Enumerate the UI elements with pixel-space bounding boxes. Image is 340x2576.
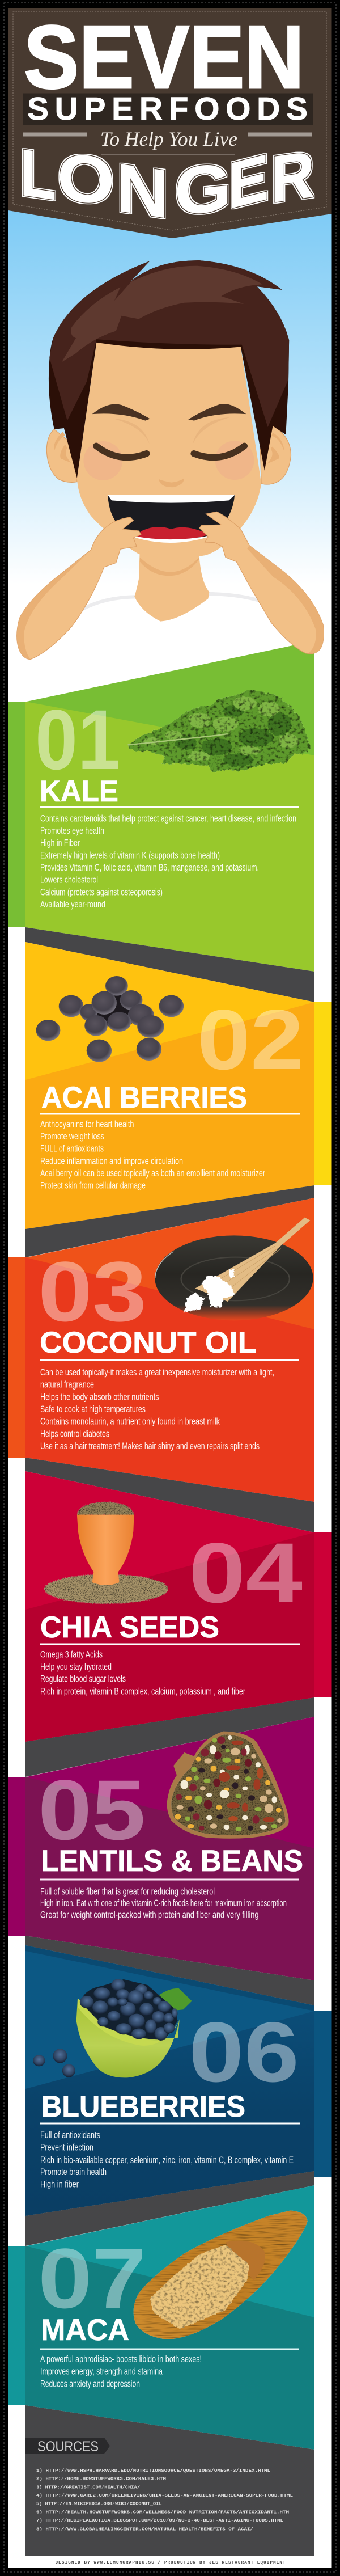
panel: kale background — [8, 641, 314, 1002]
shirt collar — [82, 594, 258, 610]
illustration: man eating — [17, 260, 324, 660]
left arm and hand — [17, 517, 141, 660]
title bar: superfoods: SUPERFOODS — [27, 91, 308, 127]
subtitle: to help you live — [23, 128, 312, 154]
panel: coconut oil background — [8, 1198, 314, 1532]
nose — [159, 478, 184, 487]
facts: acai berries: Acai berry oil can be used topically as both an emollient and moisturizer — [40, 1168, 265, 1179]
number 01: 01 — [35, 692, 120, 787]
footer credit: DESIGNED BY WWW.LEMONGRAPHIC.SG / PRODUCTION BY JES RESTAURANT EQUIPMENT — [56, 2561, 286, 2565]
facts: blueberries — [40, 2130, 294, 2190]
header banner — [8, 7, 332, 238]
facts: chia seeds: Help you stay hydrated — [40, 1661, 112, 1672]
image: heart bowl of beans — [167, 1732, 289, 1839]
image: chia seeds in orange cup — [44, 1502, 168, 1604]
facts: lentils and beans: Full of soluble fiber that is great for reducing cholesterol — [40, 1886, 215, 1897]
facts: chia seeds: Omega 3 fatty Acids — [40, 1649, 103, 1659]
facts: acai berries: Anthocyanins for heart health — [40, 1118, 134, 1129]
image: frying pan with coconut oil — [155, 1218, 313, 1320]
panel: lentils background — [8, 1717, 314, 2005]
panel: sources — [26, 2405, 314, 2556]
source links: 7) HTTP://RECIPEAEXOTICA.BLOGSPOT.COM/2010/09/NO-3-40-BEST-ANTI-AGING-FOODS.HTML — [36, 2519, 283, 2523]
number 05: 05 — [38, 1762, 146, 1857]
facts: coconut oil: Contains monolaurin, a nutrient only found in breast milk — [40, 1416, 220, 1427]
number 03: 03 — [38, 1244, 147, 1339]
title: longer: O — [57, 140, 114, 218]
neck — [134, 548, 209, 622]
facts: maca — [40, 2354, 202, 2389]
panel: acai background — [26, 942, 332, 1257]
heading: maca: MACA — [41, 2313, 129, 2347]
section 06: blueberries — [26, 1945, 332, 2246]
eyebrows — [92, 404, 246, 421]
section 03: coconut oil — [8, 1198, 314, 1532]
panel: blueberries background — [26, 1945, 332, 2246]
facts: acai berries: FULL of antioxidants — [40, 1143, 104, 1154]
heading: kale: KALE — [40, 775, 118, 808]
facts: coconut oil: Helps the body absorb other nutrients — [40, 1391, 159, 1402]
facts: kale: Extremely high levels of vitamin K (supports bone health) — [40, 850, 220, 860]
section 05: lentils and beans — [8, 1717, 314, 2005]
facts: blueberries: Promote brain health — [40, 2167, 107, 2177]
number 06: 06 — [189, 2004, 299, 2100]
title: longer: G — [175, 150, 231, 230]
facts: kale: Provides Vitamin C, folic acid, vitamin B6, manganese, and potassium. — [40, 862, 259, 873]
section 01: kale — [35, 690, 310, 910]
facts: coconut oil: Use it as a hair treatment! Makes hair shiny and even repairs split ends — [40, 1441, 260, 1451]
source links: 4) HTTP://WWW.CARE2.COM/GREENLIVING/CHIA-SEEDS-AN-ANCIENT-AMERICAN-SUPER-FOOD.HTML — [36, 2494, 293, 2498]
mouth — [108, 495, 235, 542]
source links: 2) HTTP://HOME.HOWSTUFFWORKS.COM/KALE3.HTM — [36, 2477, 166, 2481]
facts: blueberries: Full of antioxidants — [40, 2130, 100, 2140]
hair — [49, 260, 289, 478]
heading: lentils and beans: LENTILS & BEANS — [41, 1844, 303, 1878]
face — [77, 343, 261, 558]
source links: 3) HTTP://GREATIST.COM/HEALTH/CHIA/ — [36, 2486, 140, 2490]
source links: 5) HTTP://EN.WIKIPEDIA.ORG/WIKI/COCONUT_OIL — [36, 2502, 162, 2506]
section 07: maca — [8, 2185, 314, 2450]
heading: blueberries: BLUEBERRIES — [41, 2090, 245, 2123]
facts: chia seeds: Regulate blood sugar levels — [40, 1674, 126, 1684]
facts: kale: Promotes eye health — [40, 825, 104, 836]
facts: coconut oil: Helps control diabetes — [40, 1428, 109, 1439]
title: longer: E — [228, 140, 269, 222]
facts: chia seeds: Rich in protein, vitamin B complex, calcium, potassium , and fiber — [40, 1686, 245, 1696]
title: longer: R — [271, 137, 314, 217]
facts: coconut oil: natural fragrance — [40, 1379, 94, 1390]
image: wooden spoon of maca powder — [134, 2210, 308, 2339]
facts: acai berries — [40, 1118, 265, 1191]
facts: chia seeds — [40, 1649, 245, 1696]
facts: acai berries: Protect skin from cellular damage — [40, 1180, 146, 1191]
facts: lentils and beans: Great for weight control-packed with protein and fiber and very filling — [40, 1910, 258, 1920]
berries — [33, 1979, 178, 2077]
facts: kale: Lowers cholesterol — [40, 875, 98, 885]
facts: kale: Calcium (protects against osteoporosis) — [40, 886, 163, 897]
sources tag: SOURCES — [37, 2439, 99, 2455]
bowl — [76, 1998, 180, 2077]
facts: blueberries: High in fiber — [40, 2179, 79, 2190]
facts: maca: A powerful aphrodisiac- boosts libido in both sexes! — [40, 2354, 202, 2364]
section 04: chia seeds — [26, 1471, 332, 1777]
ears — [46, 426, 291, 484]
ear shading — [54, 432, 284, 464]
facts: lentils and beans — [40, 1886, 287, 1920]
facts: kale: High in Fiber — [40, 838, 80, 848]
right arm and hand — [199, 512, 324, 654]
facts: maca: Reduces anxiety and depression — [40, 2378, 140, 2389]
sky background — [8, 204, 332, 584]
heading: acai berries: ACAI BERRIES — [41, 1081, 247, 1114]
leaf — [159, 1988, 192, 2011]
number 02: 02 — [197, 992, 304, 1087]
title: longer: L — [20, 135, 56, 214]
facts: coconut oil — [40, 1367, 274, 1451]
section 02: acai berries — [26, 942, 332, 1257]
facts: coconut oil: Safe to cook at high temperatures — [40, 1404, 146, 1414]
facts: maca: Improves energy, strength and stamina — [40, 2366, 163, 2377]
panel: chia background — [26, 1471, 332, 1777]
coconut oil lumps — [184, 1269, 235, 1312]
title: seven: SEVEN — [24, 7, 304, 107]
image: acai berries — [36, 976, 184, 1062]
image: bowl of blueberries — [33, 1979, 192, 2077]
source links: 8) HTTP://WWW.GLOBALHEALINGCENTER.COM/NATURAL-HEALTH/BENEFITS-OF-ACAI/ — [36, 2527, 253, 2532]
cheeks — [83, 441, 254, 480]
source links: 6) HTTP://HEALTH.HOWSTUFFWORKS.COM/WELLNESS/FOOD-NUTRITION/FACTS/ANTIOXIDANT1.HTM — [36, 2511, 289, 2515]
heading: coconut oil: COCONUT OIL — [40, 1326, 257, 1359]
source links — [36, 2469, 293, 2532]
number 07: 07 — [38, 2231, 146, 2326]
eye creases — [113, 417, 230, 445]
title: longer: N — [116, 149, 169, 233]
closed eyes — [96, 446, 244, 458]
facts: acai berries: Promote weight loss — [40, 1131, 104, 1142]
heading: chia seeds: CHIA SEEDS — [40, 1611, 219, 1644]
number 04: 04 — [189, 1525, 303, 1620]
facts: blueberries: Prevent infection — [40, 2142, 94, 2153]
facts: kale: Available year-round — [40, 899, 105, 910]
source links: 1) HTTP://WWW.HSPH.HARVARD.EDU/NUTRITIONSOURCE/QUESTIONS/OMEGA-3/INDEX.HTML — [36, 2469, 270, 2473]
image: kale leaves — [128, 690, 310, 772]
facts: kale — [40, 813, 296, 910]
facts: acai berries: Reduce inflammation and improve circulation — [40, 1155, 183, 1166]
title: longer — [20, 135, 314, 233]
panel: maca background — [8, 2185, 314, 2450]
subtitle: to help you live: To Help You Live — [100, 128, 237, 150]
